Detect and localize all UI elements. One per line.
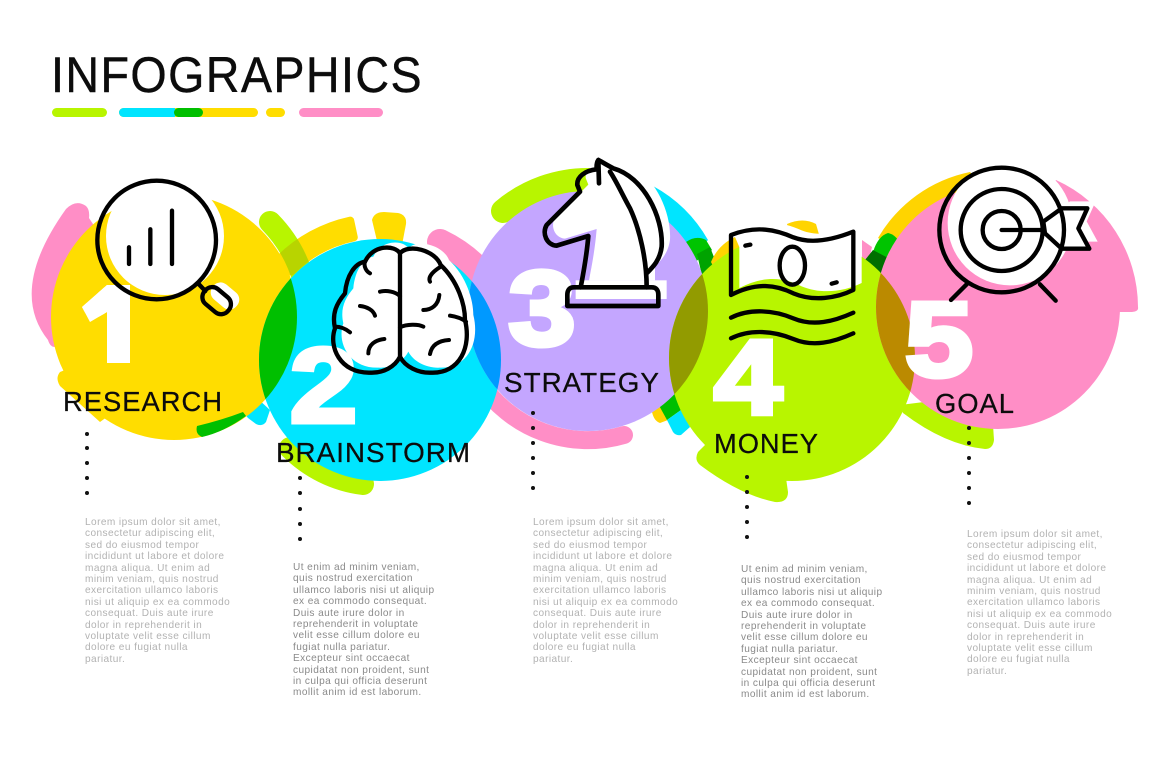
label: research: RESEARCH <box>63 386 223 417</box>
dotted connector 1 <box>85 432 89 495</box>
title colour bars <box>52 108 383 117</box>
text block: money: Ut enim ad minim veniam, quis nostrud exercitation ullamco laboris nisi ut aliquip ex ea commodo consequat. Duis aute irure dolor in reprehenderit in voluptate velit esse cillum dolore eu fugiat nulla pariatur. Excepteur sint occaecat cupidatat non proident, sunt in culpa qui officia deserunt mollit anim id est laborum. <box>741 564 882 700</box>
circle: brainstorm <box>259 239 501 481</box>
text block: goal: Lorem ipsum dolor sit amet, consectetur adipiscing elit, sed do eiusmod tempor incididunt ut labore et dolore magna aliqua. Ut enim ad minim veniam, quis nostrud exercitation ullamco laboris nisi ut aliquip ex ea commodo consequat. Duis aute irure dolor in reprehenderit in voluptate velit esse cillum dolore eu fugiat nulla pariatur. <box>967 529 1112 677</box>
label: goal: GOAL <box>935 388 1015 419</box>
numeral 1 <box>82 285 130 363</box>
numeral 4: 4 <box>714 319 782 437</box>
circle overlap lenses <box>259 273 915 400</box>
icon: target with arrow <box>939 161 1098 301</box>
circle: strategy <box>468 191 708 431</box>
icon: banknote <box>731 222 862 343</box>
dotted connector 5 <box>967 426 971 505</box>
icon: brain <box>333 243 475 373</box>
title: INFOGRAPHICS <box>51 47 423 103</box>
background accent bands <box>32 172 1138 502</box>
band: green crescent on research circle <box>197 412 246 437</box>
circle: goal <box>876 185 1120 429</box>
numeral 3: 3 <box>508 250 576 368</box>
label: brainstorm: BRAINSTORM <box>276 437 471 468</box>
label: money: MONEY <box>714 428 819 459</box>
numeral 5: 5 <box>905 281 973 399</box>
numeral 1: 1 <box>76 265 138 383</box>
circle: research <box>51 194 297 440</box>
label: strategy: STRATEGY <box>504 367 660 398</box>
text block: brainstorm: Ut enim ad minim veniam, quis nostrud exercitation ullamco laboris nisi ut aliquip ex ea commodo consequat. Duis aute irure dolor in reprehenderit in voluptate velit esse cillum dolore eu fugiat nulla pariatur. Excepteur sint occaecat cupidatat non proident, sunt in culpa qui officia deserunt mollit anim id est laborum. <box>293 562 434 698</box>
numeral 2: 2 <box>290 327 357 445</box>
icon: magnifying glass <box>97 177 243 318</box>
circle: money <box>669 235 915 481</box>
icon: chess knight <box>545 153 670 306</box>
dotted connector 3 <box>531 411 535 490</box>
dotted connector 2 <box>298 476 302 541</box>
text block: research: Lorem ipsum dolor sit amet, consectetur adipiscing elit, sed do eiusmod tempor incididunt ut labore et dolore magna aliqua. Ut enim ad minim veniam, quis nostrud exercitation ullamco laboris nisi ut aliquip ex ea commodo consequat. Duis aute irure dolor in reprehenderit in voluptate velit esse cillum dolore eu fugiat nulla pariatur. <box>85 517 230 665</box>
text block: strategy: Lorem ipsum dolor sit amet, consectetur adipiscing elit, sed do eiusmod tempor incididunt ut labore et dolore magna aliqua. Ut enim ad minim veniam, quis nostrud exercitation ullamco laboris nisi ut aliquip ex ea commodo consequat. Duis aute irure dolor in reprehenderit in voluptate velit esse cillum dolore eu fugiat nulla pariatur. <box>533 517 678 665</box>
dotted connector 4 <box>745 475 749 539</box>
